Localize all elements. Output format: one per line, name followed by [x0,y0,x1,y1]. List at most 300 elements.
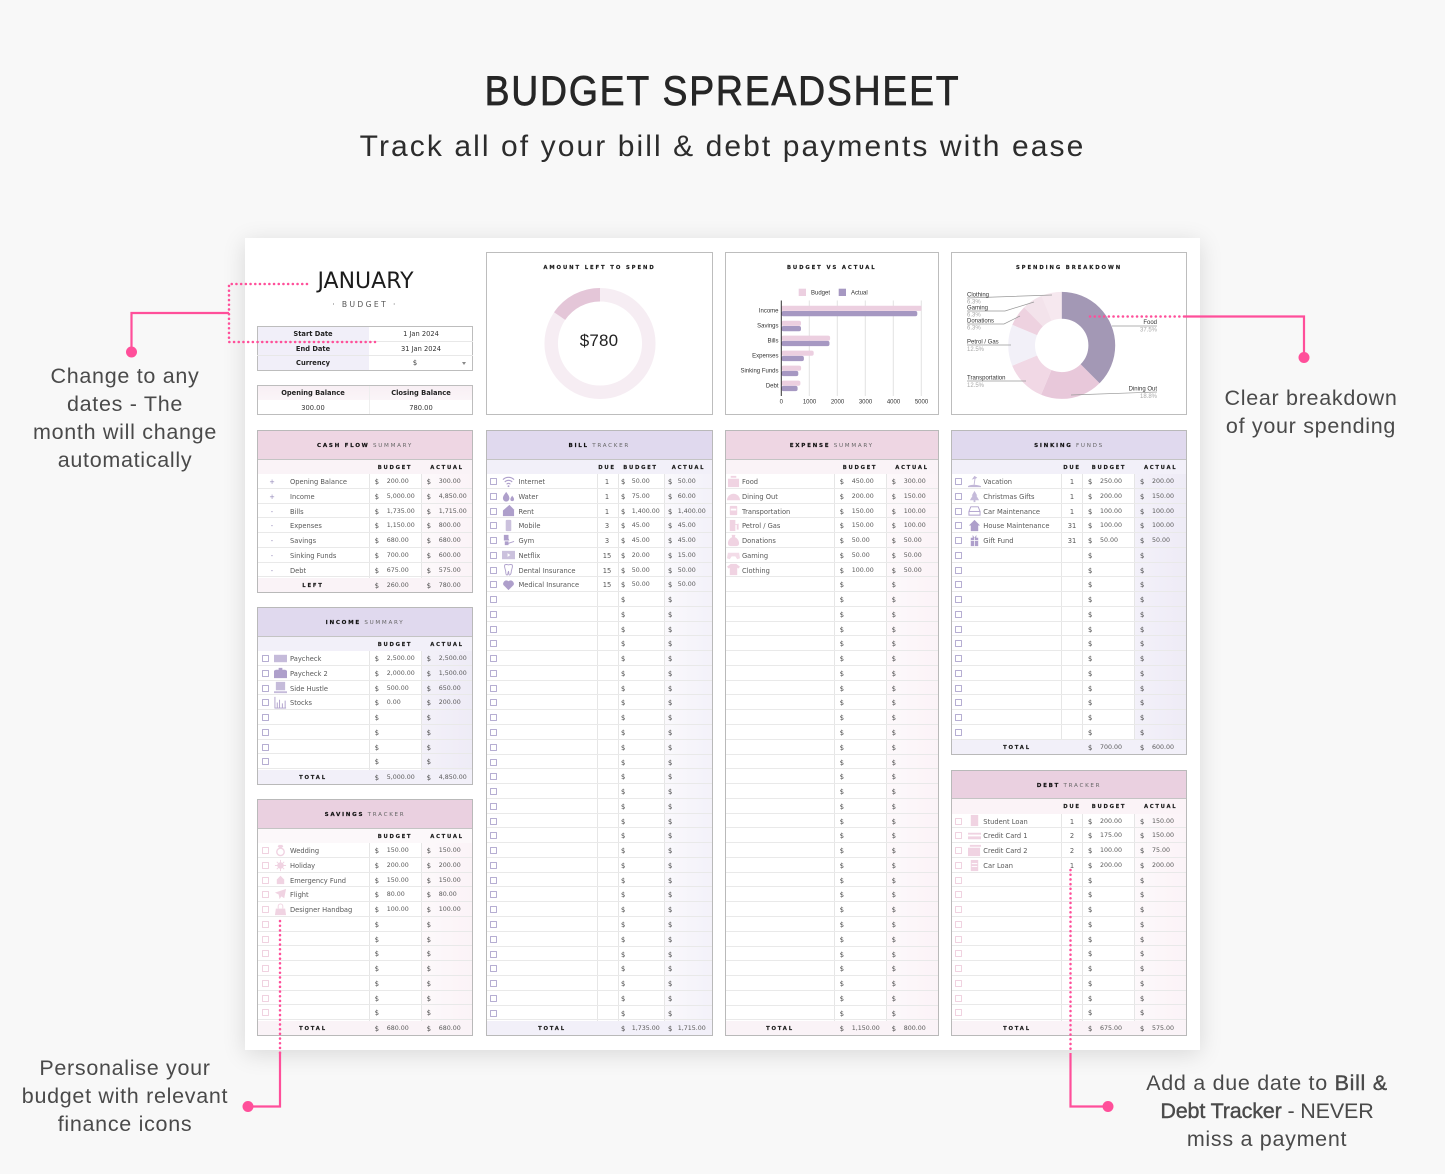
heading: savings tracker: SAVINGS TRACKER [325,812,405,818]
rows [726,476,938,1020]
rows: $ [621,714,625,722]
rows: $ [840,567,844,575]
rows: $ [1140,522,1144,530]
rows: $ [1088,552,1092,560]
callout: finance icons: budget with relevant [22,1084,228,1108]
rows: Credit Card 1 [983,832,1028,840]
rows: $ [621,950,625,958]
rows: $ [892,478,896,486]
rows: $ [375,537,379,545]
rows: - [271,508,273,516]
rows: 1 [1070,508,1074,516]
icon: ring [276,844,285,856]
rows: $ [427,714,431,722]
rows: Petrol / Gas [742,522,780,530]
rows: $ [621,832,625,840]
axis labels: 4000 [887,400,901,406]
heading: cash flow summary: CASH FLOW SUMMARY [317,443,413,449]
icon: food basket [728,476,739,488]
rows: $ [375,478,379,486]
rows: Gift Fund [983,537,1014,545]
rows: Dental Insurance [518,567,576,575]
rows: $ [840,581,844,589]
slice percentages: 6.3% [967,300,981,306]
icon: car loan document [968,859,981,872]
rows: $ [427,891,431,899]
rows: $ [892,877,896,885]
rows: 700.00 [387,552,409,559]
total row: LEFT [302,583,324,589]
rows: $ [1140,906,1144,914]
rows: $ [1088,537,1092,545]
rows: $ [375,699,379,707]
rows: $ [668,493,672,501]
panel: date settings: 31 Jan 2024 [401,345,441,353]
icon: paycheck [274,654,287,662]
panel: debt tracker [951,770,1187,1036]
panel: date settings: 1 Jan 2024 [403,330,439,338]
rows: 2 [1070,847,1074,855]
rows: $ [375,729,379,737]
rows: 3 [605,522,609,530]
rows: $ [840,818,844,826]
rows: $ [427,995,431,1003]
rows: $ [668,832,672,840]
rows: $ [892,936,896,944]
rows: $ [621,906,625,914]
panel: sinking funds [951,430,1187,755]
total row: $ [375,774,379,782]
rows: $ [427,522,431,530]
rows: $ [1140,995,1144,1003]
category labels: Sinking Funds [740,368,778,374]
rows: $ [621,1010,625,1018]
rows: 50.00 [1152,537,1170,544]
icon: briefcase [274,668,287,678]
rows: 600.00 [439,552,461,559]
rows: $ [1088,493,1092,501]
rows: $ [840,936,844,944]
rows: $ [1140,862,1144,870]
callout: change dates: Change to any [51,364,199,388]
rows: 200.00 [1100,818,1122,824]
column headers: ACTUAL [430,642,464,648]
total row: 260.00 [387,582,409,589]
heading: January budget: · BUDGET · [332,300,398,309]
callout: due date: Add a due date to Bill & [1146,1071,1388,1095]
icon: island [968,476,981,488]
rows: $ [375,670,379,678]
rows: 1,735.00 [387,508,415,515]
rows: $ [1140,714,1144,722]
rows: $ [1140,552,1144,560]
total row: 1,735.00 [632,1025,660,1032]
rows: Paycheck [290,655,321,663]
rows: 50.00 [632,478,650,485]
rows: $ [668,626,672,634]
heading: bill tracker: BILL TRACKER [569,443,630,449]
rows: $ [892,493,896,501]
rows: 1,715.00 [439,508,467,515]
rows: 100.00 [904,508,926,515]
icon: petrol pump [730,520,739,531]
rows: 100.00 [1100,508,1122,515]
rows: $ [840,626,844,634]
rows: $ [892,670,896,678]
slice labels: Clothing [967,292,989,298]
rows: Car Maintenance [983,508,1040,516]
rows: $ [1140,699,1144,707]
rows: 1 [1070,478,1074,486]
rows: $ [621,626,625,634]
rows: 3 [605,537,609,545]
rows: $ [621,995,625,1003]
rows: $ [621,744,625,752]
rows: $ [1088,936,1092,944]
panel: budget vs actual: BUDGET VS ACTUAL [787,265,877,271]
rows: Designer Handbag [290,906,352,914]
rows: $ [668,640,672,648]
rows: $ [1140,965,1144,973]
slice percentages: 37.5% [1140,328,1158,334]
rows: $ [668,655,672,663]
callout: clear breakdown: Clear breakdown [1224,386,1398,410]
column headers [257,460,473,474]
icon: water drops [502,492,514,502]
panel: expense summary [725,430,938,1036]
panel: date settings: $ [413,359,417,367]
rows: Emergency Fund [290,877,346,885]
rows: $ [1140,611,1144,619]
rows: Wedding [290,847,319,855]
panel: opening and closing balance [257,385,473,415]
axis labels: 3000 [859,400,873,406]
rows: $ [427,699,431,707]
total row: 5,000.00 [387,774,415,780]
rows: Income [290,493,315,501]
rows: Car Loan [983,862,1013,870]
rows: $ [892,818,896,826]
rows: $ [1088,891,1092,899]
rows: $ [892,640,896,648]
rows: $ [375,714,379,722]
rows: $ [1088,818,1092,826]
total row: 1,715.00 [678,1025,706,1032]
rows: - [271,552,273,560]
column headers: BUDGET [378,464,412,470]
rows: $ [375,655,379,663]
rows: 200.00 [1100,493,1122,500]
rows: Dining Out [742,493,778,501]
rows: $ [840,788,844,796]
rows: $ [892,596,896,604]
callout: due date: Debt Tracker - NEVER [1160,1099,1374,1123]
rows: $ [668,995,672,1003]
rows: $ [621,478,625,486]
rows: $ [375,950,379,958]
callout: clear breakdown: of your spending [1226,414,1396,438]
rows: $ [1140,626,1144,634]
column headers [257,828,473,843]
rows: $ [840,685,844,693]
heading: sinking funds [951,430,1187,460]
rows: $ [892,921,896,929]
rows: 150.00 [439,877,461,884]
rows: $ [1088,877,1092,885]
rows: $ [1088,685,1092,693]
heading: savings tracker [257,799,473,828]
budget bars [782,306,922,386]
rows: $ [668,877,672,885]
rows: $ [1088,655,1092,663]
rows: $ [375,891,379,899]
rows: $ [621,611,625,619]
rows: 1,500.00 [439,670,467,677]
rows: 4,850.00 [439,493,467,500]
axis labels: 2000 [831,400,845,406]
callout: clear breakdown [1186,384,1436,440]
rows: Debt [290,567,306,575]
rows: + [269,478,275,486]
rows: 200.00 [387,862,409,869]
legend [799,289,868,296]
rows: $ [375,995,379,1003]
rows: $ [668,803,672,811]
rows: Expenses [290,522,322,530]
column headers: BUDGET [623,464,658,470]
rows: 300.00 [439,478,461,485]
rows: $ [1088,950,1092,958]
category labels: Income [759,308,779,314]
rows: Paycheck 2 [290,670,328,678]
title: BUDGET SPREADSHEET [485,67,960,114]
rows: $ [375,965,379,973]
rows: 2,000.00 [387,670,415,677]
rows: 45.00 [632,537,650,544]
slice percentages [967,300,1158,400]
callout: finance icons: Personalise your [39,1056,211,1080]
rows: 1 [1070,818,1074,826]
axis labels: 1000 [803,400,817,406]
rows: 1 [1070,862,1074,870]
column headers [486,460,713,474]
slice percentages: 18.8% [1140,394,1158,400]
rows: $ [1140,640,1144,648]
total row: TOTAL [538,1026,566,1032]
rows: $ [840,995,844,1003]
total row: $ [668,1025,672,1033]
rows: 1 [1070,493,1074,501]
total row: 800.00 [904,1025,926,1032]
rows: $ [621,759,625,767]
rows: $ [892,773,896,781]
rows: $ [840,611,844,619]
rows: $ [840,877,844,885]
rows: $ [621,685,625,693]
panel: cash flow summary [257,430,473,593]
rows: $ [427,493,431,501]
total row: $ [427,582,431,590]
heading: debt tracker [951,770,1187,799]
rows: Donations [742,537,776,545]
rows: $ [1140,832,1144,840]
icon: plane [275,889,286,899]
rows: Gym [518,537,534,545]
rows [952,815,1186,1020]
icon: game controller [727,552,740,560]
rows: 45.00 [678,522,696,529]
rows: $ [668,788,672,796]
rows: 450.00 [852,478,874,485]
category labels: Bills [767,338,778,344]
icon: credit cards [968,844,981,857]
panel: spending breakdown [951,252,1187,415]
rows: Vacation [983,478,1012,486]
heading: income summary: INCOME SUMMARY [326,620,404,626]
rows: $ [427,950,431,958]
rows: $ [840,537,844,545]
total row [951,740,1187,755]
rows: $ [1140,655,1144,663]
subtitle: Track all of your bill & debt payments with ease [360,130,1085,163]
icon: car [968,506,980,516]
rows: $ [1140,1009,1144,1017]
rows: $ [840,478,844,486]
rows: $ [892,714,896,722]
rows: 50.00 [852,537,870,544]
callout: due date: miss a payment [1187,1127,1347,1151]
icon: sun [275,860,286,872]
rows: 50.00 [852,552,870,559]
heading: January budget: JANUARY [317,269,414,294]
callout: change dates: month will change [33,420,217,444]
column headers [951,799,1187,814]
callout: change dates: automatically [58,448,192,472]
rows: $ [621,581,625,589]
rows: $ [427,1009,431,1017]
arrow: spending breakdown leader [1090,316,1310,363]
rows: 50.00 [678,581,696,588]
icon: laptop [274,682,287,694]
rows: 5,000.00 [387,493,415,500]
panel: date settings [257,326,473,371]
slice percentages: 12.5% [967,347,985,353]
total row: TOTAL [1003,1026,1031,1032]
rows: $ [621,567,625,575]
rows: $ [668,936,672,944]
icon: safe house [276,876,284,884]
rows: 15 [603,552,611,560]
rows: $ [668,906,672,914]
category labels [740,308,779,389]
rows: $ [1088,906,1092,914]
category labels: Debt [766,383,779,389]
heading: January budget [316,269,414,309]
rows: 175.00 [1100,832,1122,839]
rows: $ [375,847,379,855]
rows: 50.00 [1100,537,1118,544]
callout: due date [1117,1069,1417,1153]
icon: tooth [504,564,513,576]
rows: 100.00 [852,567,874,574]
rows: $ [1088,847,1092,855]
rows: 45.00 [678,537,696,544]
rows: $ [375,567,379,575]
rows: $ [621,699,625,707]
rows: $ [427,936,431,944]
rows: $ [621,670,625,678]
icon: donation bag [728,534,739,546]
column headers [951,460,1187,474]
rows: $ [621,522,625,530]
panel: amount left to spend: AMOUNT LEFT TO SPEND [543,265,656,271]
rows: Rent [518,508,534,516]
rows: $ [892,581,896,589]
rows: $ [892,655,896,663]
total row: $ [375,1024,379,1032]
rows: $ [668,537,672,545]
rows: $ [427,537,431,545]
rows: $ [1088,508,1092,516]
slice labels: Gaming [967,306,988,312]
rows: 50.00 [632,567,650,574]
leader lines [967,295,1157,395]
rows [487,476,712,1020]
total row [486,1021,713,1036]
rows: $ [892,552,896,560]
rows: $ [1088,729,1092,737]
rows: 200.00 [1100,862,1122,869]
rows: 100.00 [904,522,926,529]
total row [951,1020,1187,1036]
rows: $ [840,921,844,929]
rows: $ [840,714,844,722]
slice labels: Petrol / Gas [967,340,999,346]
total row: 1,150.00 [852,1025,880,1032]
icon: gift [970,535,978,546]
icon: gym [504,534,514,546]
rows: 150.00 [1152,832,1174,839]
rows: $ [840,965,844,973]
rows: $ [621,729,625,737]
rows: Opening Balance [290,478,347,486]
rows: $ [1140,581,1144,589]
heading: expense summary [725,430,938,460]
rows: $ [427,980,431,988]
rows: $ [1140,950,1144,958]
rows: 1,400.00 [678,508,706,515]
rows: $ [668,714,672,722]
rows: $ [621,788,625,796]
rows: 0.00 [387,699,401,706]
rows: $ [1088,611,1092,619]
rows: $ [1088,596,1092,604]
rows: 150.00 [1152,818,1174,824]
column headers: ACTUAL [430,464,464,470]
rows: 100.00 [1100,522,1122,529]
rows: $ [375,685,379,693]
panel: date settings: Currency [296,359,330,367]
rows: 2 [1070,832,1074,840]
rows: $ [840,803,844,811]
rows: 800.00 [439,522,461,529]
column headers [725,460,938,474]
rows: 100.00 [439,906,461,913]
rows: $ [668,980,672,988]
rows: $ [892,862,896,870]
total row: 600.00 [1152,744,1174,751]
rows: $ [375,508,379,516]
